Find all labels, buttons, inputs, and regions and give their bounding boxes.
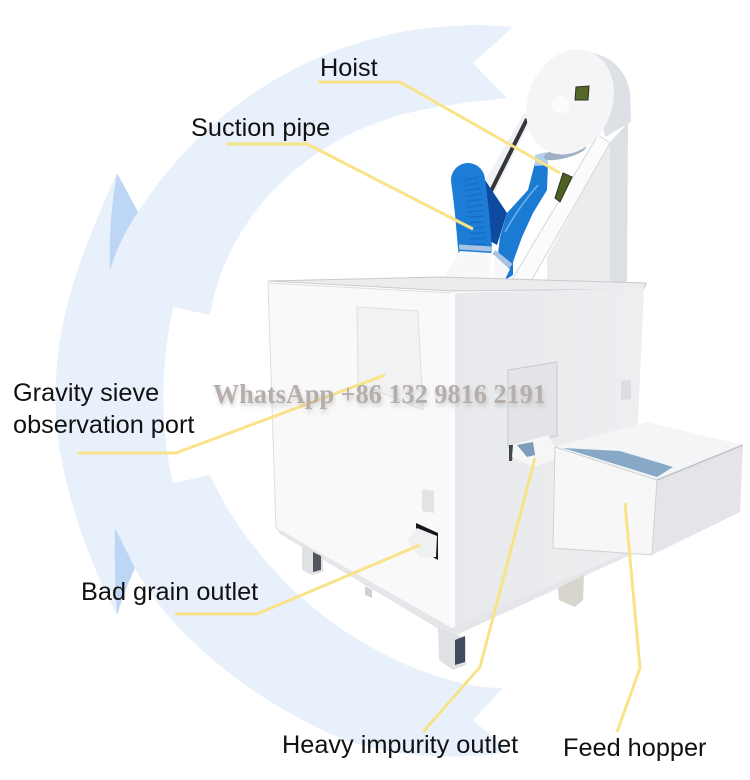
left hose bbox=[468, 180, 475, 248]
legs bbox=[302, 545, 584, 670]
line: suction pipe bbox=[226, 144, 473, 229]
bad grain outlet bbox=[407, 523, 438, 560]
feed door: right bbox=[508, 362, 557, 447]
arrowhead shadow: upper bbox=[110, 173, 138, 270]
hoist column bbox=[482, 50, 631, 287]
inspection window: column bbox=[555, 173, 572, 202]
top of cabinet bbox=[268, 277, 646, 291]
label: feed hopper: Feed hopper bbox=[563, 734, 706, 762]
line: bad grain outlet bbox=[175, 545, 420, 614]
label: hoist: Hoist bbox=[320, 54, 378, 82]
heavy impurity chute bbox=[509, 435, 557, 467]
machine bbox=[268, 36, 743, 670]
arrowhead shadow: lower bbox=[115, 528, 135, 615]
right face bbox=[453, 288, 644, 628]
line: hoist bbox=[318, 82, 560, 173]
right hose bbox=[497, 163, 548, 280]
label: gravity sieve observation port: observation port bbox=[13, 411, 194, 439]
blue hoses bbox=[440, 152, 548, 284]
label: bad grain outlet: Bad grain outlet bbox=[81, 578, 258, 606]
arrow band: top and left bbox=[56, 25, 513, 757]
label: gravity sieve observation port: Gravity sieve bbox=[13, 379, 159, 407]
leader lines bbox=[78, 82, 640, 732]
line: gravity sieve bbox=[78, 375, 385, 453]
label: heavy impurity outlet: Heavy impurity outlet bbox=[282, 731, 518, 759]
label: suction pipe: Suction pipe bbox=[191, 114, 330, 142]
hose clamps bbox=[459, 247, 511, 266]
pulley bbox=[511, 36, 629, 168]
corner strip bbox=[450, 293, 455, 630]
observation door: left bbox=[357, 307, 423, 410]
line: heavy impurity outlet bbox=[423, 458, 535, 732]
watermark: WhatsApp +86 132 9816 2191 bbox=[213, 379, 546, 409]
background circular arrows bbox=[56, 25, 513, 757]
nameplates bbox=[422, 489, 434, 513]
dark hose shadow bbox=[485, 180, 507, 245]
label: gravity sieve observation port bbox=[13, 379, 194, 439]
left face bbox=[268, 283, 452, 632]
feed hopper bbox=[553, 422, 743, 555]
base rail bbox=[276, 528, 628, 637]
line: feed hopper bbox=[617, 503, 640, 732]
white connectors bbox=[440, 251, 491, 284]
